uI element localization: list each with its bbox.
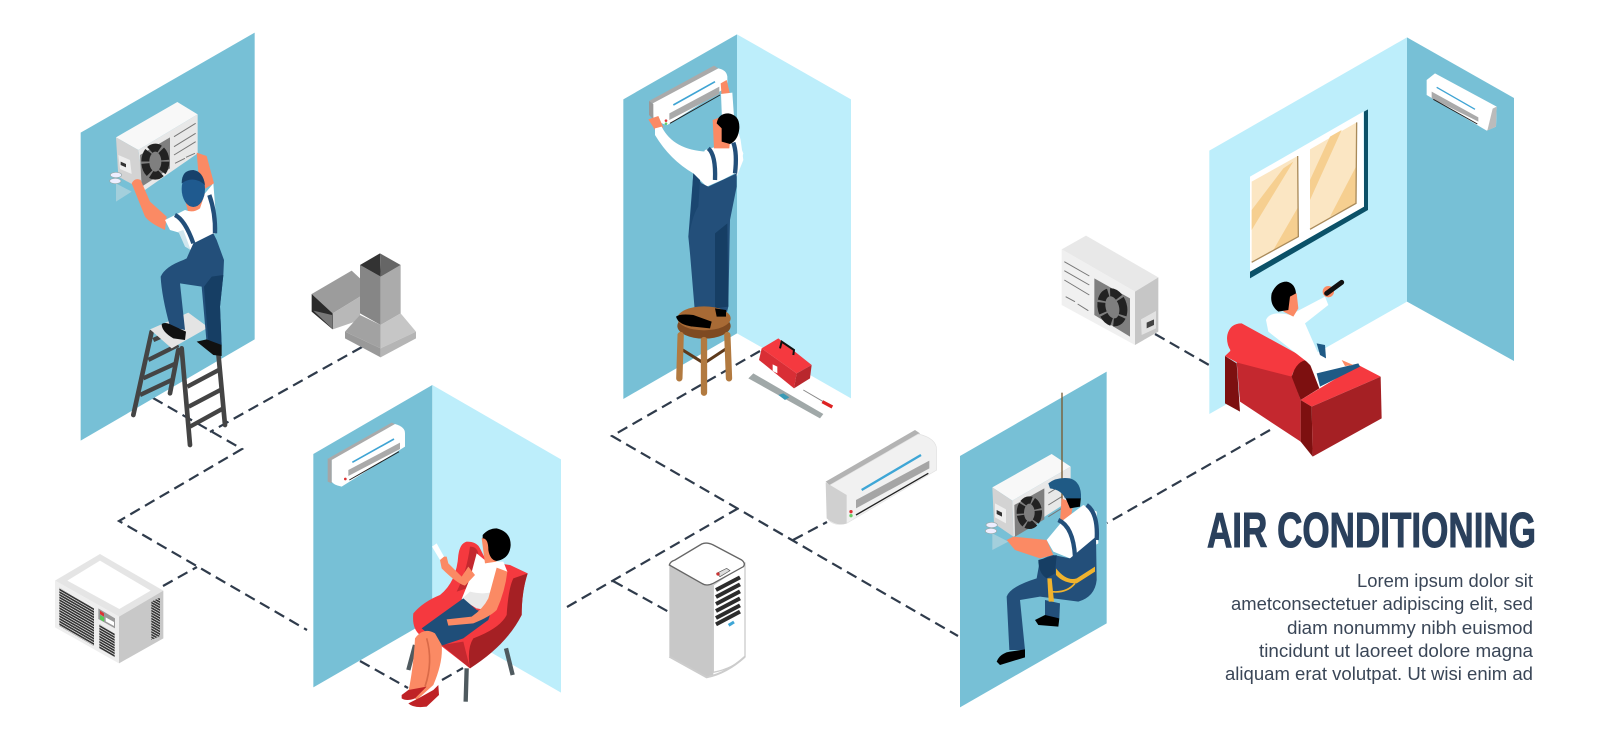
wooden stool [677, 306, 731, 393]
corner walls [1209, 37, 1514, 414]
icon: portable tower air conditioner [669, 543, 745, 677]
body text: aliquam erat volutpat. Ut wisi enim ad [1225, 663, 1533, 684]
wall [81, 33, 255, 441]
indoor AC unit [328, 423, 405, 487]
spirit level [748, 373, 823, 418]
toolbox [759, 338, 812, 388]
wall [960, 372, 1107, 707]
body text: ametconsectetuer adipiscing elit, sed [1231, 593, 1533, 614]
outdoor AC unit on wall [110, 102, 198, 202]
rope [1060, 393, 1064, 517]
outdoor AC unit [1062, 236, 1158, 345]
shoes [676, 308, 726, 328]
worker [132, 153, 224, 356]
air duct [312, 253, 416, 357]
body text: tincidunt ut laoreet dolore magna [1259, 640, 1534, 661]
corner walls [623, 34, 851, 399]
scene: technician on stool installing indoor unit [623, 34, 851, 418]
scene: woman in armchair with remote control [313, 385, 561, 707]
body text: diam nonummy nibh euismod [1287, 617, 1533, 638]
window [1250, 109, 1368, 278]
woman [402, 528, 511, 707]
scene: man in armchair with remote [1062, 37, 1514, 457]
scene: technician on rope servicing outdoor unit [960, 372, 1107, 707]
worker [997, 478, 1098, 665]
indoor AC unit [649, 66, 727, 125]
icon: split indoor air conditioner [826, 430, 937, 524]
worker [648, 80, 743, 318]
scene: technician on ladder installing outdoor unit [81, 33, 416, 445]
corner walls [313, 385, 561, 693]
stepladder [133, 313, 225, 445]
seated man [1266, 282, 1360, 387]
body text: Lorem ipsum dolor sit [1357, 570, 1533, 591]
armchair [1225, 323, 1382, 457]
screwdriver [803, 390, 832, 407]
icon: window air conditioner [55, 554, 163, 663]
armchair [408, 542, 528, 702]
indoor AC unit [1427, 73, 1497, 131]
dashed connector lines [119, 334, 1270, 688]
body text [1225, 570, 1534, 684]
outdoor AC unit on wall [985, 454, 1071, 550]
